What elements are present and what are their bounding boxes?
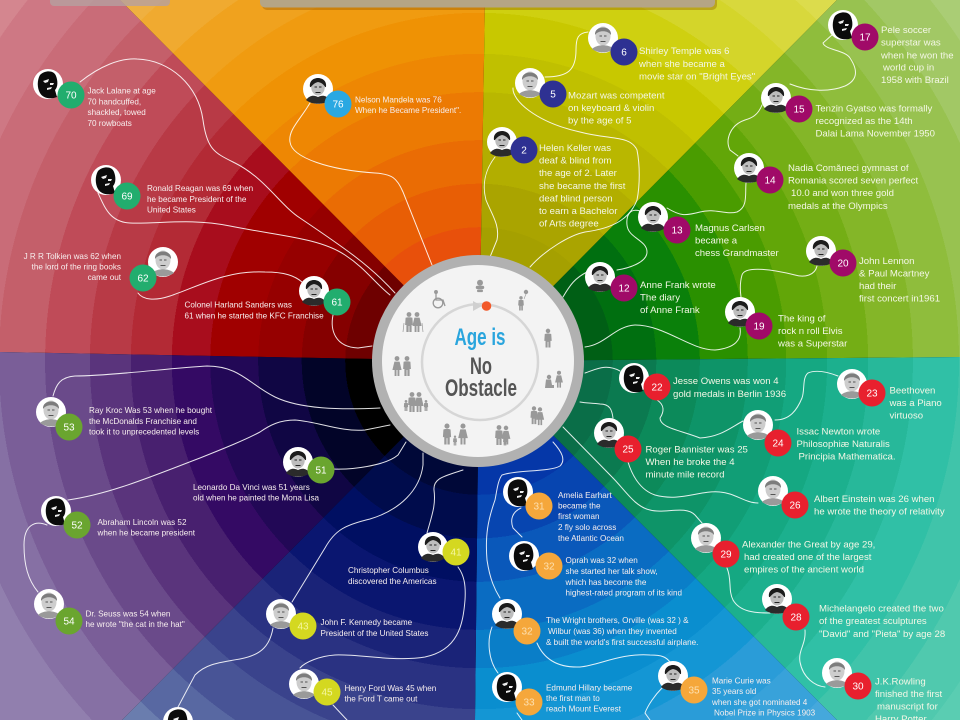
person: Henry Ford (289, 669, 436, 706)
person: Isaac Newton: Issac Newton wrote (796, 426, 880, 438)
person: Christopher Columbus: 41 (450, 548, 462, 558)
person: Anne Frank: of Anne Frank (640, 305, 700, 316)
person: Ray Kroc: 53 (63, 422, 75, 434)
person: Roger Bannister: minute mile record (646, 470, 724, 480)
person: Alexander the Great: had created one of the largest (744, 552, 872, 563)
person: John F. Kennedy (266, 599, 428, 640)
person: Amelia Earhart: 2 fly solo across (558, 523, 616, 532)
person: Marie Curie: when she got nominated 4 (711, 698, 808, 707)
person: Michelangelo: 28 (790, 612, 802, 624)
person: Pele (828, 10, 954, 86)
person: Helen Keller (487, 127, 626, 230)
person: Pele: superstar was (881, 38, 941, 48)
person: Jack Lalane (33, 69, 156, 128)
person: Ray Kroc: took it to unprecedented levels (89, 428, 199, 437)
person: Shirley Temple: movie star on "Bright Eyes" (639, 72, 755, 82)
person: Christopher Columbus (348, 532, 470, 586)
person: Nadia Comaneci: medals at the Olympics (788, 201, 888, 212)
person: Henry Ford: Henry Ford Was 45 when (344, 684, 436, 693)
person: Pele: when he won the (880, 50, 954, 61)
person: Wright brothers: The Wright brothers, Orville (was 32 ) & (546, 616, 689, 625)
person: Oprah: she started her talk show, (566, 567, 658, 576)
person: John Lennon: had their (859, 281, 897, 292)
person: J.K. Rowling (822, 658, 943, 720)
background sector: navy (122, 361, 479, 720)
person: Jesse Owens: Jesse Owens was won 4 (673, 376, 779, 387)
person: Tenzin Gyatso (761, 83, 935, 140)
background sector: green (479, 0, 960, 361)
person: Anne Frank: 12 (618, 284, 630, 294)
person: Nelson Mandela: 76 (332, 100, 344, 110)
person: John F. Kennedy: John F. Kennedy became (320, 618, 412, 627)
person: Dr. Seuss: 54 (63, 616, 75, 628)
person: Jack Lalane: 70 (65, 90, 77, 102)
person: Mozart: on keyboard & violin (568, 103, 654, 114)
background sector: purple (0, 352, 479, 720)
person: Tenzin Gyatso: recognized as the 14th (816, 116, 913, 127)
person: Oprah: Oprah was 32 when (566, 556, 638, 565)
person: Tenzin Gyatso: 15 (793, 104, 805, 116)
person: Helen Keller: Helen Keller was (539, 143, 611, 154)
person: Wright brothers: Wilbur (was 36) when they invented (548, 627, 677, 636)
person: Edmund Hillary: reach Mount Everest (546, 704, 622, 714)
person: Amelia Earhart: Amelia Earhart (558, 491, 612, 500)
icon: family of four (404, 392, 428, 412)
person: Wright brothers: & built the world's first successful airplane. (546, 638, 698, 647)
person: Alexander the Great (691, 523, 875, 576)
person: Albert Einstein: 26 (789, 500, 801, 512)
portrait: cropped bottom figure (163, 707, 193, 720)
person: Magnus Carlsen: chess Grandmaster (695, 248, 780, 259)
person: Ronald Reagan: he became President of the (147, 195, 247, 204)
person: Jesse Owens: gold medals in Berlin 1936 (673, 389, 786, 400)
person: Jack Lalane: Jack Lalane at age (88, 86, 156, 96)
person: Albert Einstein (758, 476, 945, 518)
person: Nelson Mandela: Nelson Mandela was 76 (355, 96, 442, 104)
person: Leonardo Da Vinci (193, 447, 334, 502)
person: J R R Tolkien: the lord of the ring books (32, 262, 121, 272)
hub inner disc (382, 265, 574, 457)
person: Helen Keller: deaf blind person (539, 194, 613, 204)
person: Abraham Lincoln (41, 496, 196, 538)
person: Colonel Sanders: 61 when he started the KFC Franchise (184, 312, 324, 320)
person: Abraham Lincoln: 52 (71, 520, 83, 532)
person: Dr. Seuss: he wrote "the cat in the hat" (86, 620, 185, 629)
person: Henry Ford: 45 (321, 688, 333, 698)
person: Elvis: rock n roll Elvis (778, 326, 843, 337)
background sector: blue (475, 361, 837, 720)
background sector: orange (120, 0, 485, 361)
top banner remnant centre (260, 0, 717, 10)
person: Beethoven: was a Piano (888, 398, 942, 409)
person: Jack Lalane: 70 rowboats (88, 119, 132, 128)
person: Mozart: 5 (550, 90, 556, 100)
person: Wright brothers (492, 599, 698, 647)
hub arrow (473, 301, 482, 311)
person: Nelson Mandela: When he Became President". (355, 106, 461, 115)
person: Dr. Seuss: Dr. Seuss was 54 when (86, 610, 170, 618)
person: Edmund Hillary (492, 672, 633, 716)
person: Abraham Lincoln: when he became president (96, 528, 196, 538)
person: Roger Bannister: 25 (622, 444, 634, 456)
person: Beethoven: Beethoven (890, 386, 935, 396)
hub title: Obstacle (445, 375, 517, 402)
person: John Lennon: & Paul Mcartney (859, 268, 930, 280)
person: Amelia Earhart: the Atlantic Ocean (558, 534, 624, 543)
hub title (445, 324, 517, 402)
person: Isaac Newton (743, 410, 896, 462)
person: J.K. Rowling: 30 (852, 682, 864, 692)
hub title: No (470, 353, 492, 380)
person: Pele: world cup in (882, 63, 934, 74)
person: Mozart: Mozart was competent (568, 90, 665, 102)
person: Ronald Reagan: United States (147, 206, 196, 214)
life stage icons (392, 280, 563, 446)
person: Mozart: by the age of 5 (568, 116, 631, 126)
person: Oprah: which has become the (564, 578, 647, 587)
person: Nadia Comaneci (734, 153, 918, 212)
person: J R R Tolkien: 62 (137, 274, 149, 284)
person: Nadia Comaneci: Romania scored seven perfect (788, 176, 918, 186)
person: Christopher Columbus: discovered the Americas (348, 577, 437, 586)
hub orange dot (482, 301, 491, 311)
icon: family with child (495, 425, 510, 446)
person: Beethoven: 23 (866, 388, 878, 400)
person: Elvis: The king of (778, 314, 825, 324)
person: Alexander the Great: Alexander the Great by age 29, (742, 540, 875, 550)
person: Shirley Temple: when she became a (638, 59, 726, 70)
person: Alexander the Great: empires of the ancient world (744, 564, 864, 576)
person: Shirley Temple: 6 (621, 48, 627, 58)
top banner remnant left (50, 0, 170, 6)
person: Colonel Sanders: Colonel Harland Sanders was (184, 300, 292, 310)
icon: baby (476, 280, 484, 292)
icon: adult pair (392, 356, 411, 376)
person: Henry Ford: the Ford T came out (344, 694, 418, 704)
person: Isaac Newton: Philosophiæ Naturalis (796, 439, 890, 450)
person: Jesse Owens (619, 363, 786, 400)
person: J.K. Rowling: J.K.Rowling (875, 676, 926, 688)
icon: elderly couple (403, 312, 423, 332)
person: Elvis: was a Superstar (777, 338, 848, 350)
person: Colonel Sanders (184, 276, 350, 320)
person: Marie Curie (658, 661, 816, 718)
person: Beethoven (837, 369, 942, 422)
person: Roger Bannister: When he broke the 4 (646, 457, 735, 468)
person: Helen Keller: 2 (521, 146, 527, 156)
person: Edmund Hillary: Edmund Hillary became (546, 684, 632, 692)
person: Pele: Pele soccer (881, 25, 931, 36)
person: Helen Keller: of Arts degree (539, 218, 599, 230)
icon: parents and child (443, 424, 468, 446)
person: Abraham Lincoln: Abraham Lincoln was 52 (98, 518, 186, 527)
person: Anne Frank: The diary (640, 292, 680, 304)
person: Amelia Earhart (503, 477, 624, 543)
person: Edmund Hillary: 33 (523, 698, 535, 708)
person: Marie Curie: 35 years old (712, 687, 756, 696)
person: Helen Keller: the age of 2. Later (539, 168, 618, 179)
person: Jack Lalane: shackled, towed (88, 108, 146, 117)
person: John F. Kennedy: 43 (297, 622, 309, 632)
hub outer ring (372, 255, 584, 467)
person: J.K. Rowling: finished the first (875, 689, 943, 700)
person: Michelangelo: Michelangelo created the two (819, 604, 944, 614)
person: John F. Kennedy: President of the United States (320, 629, 428, 638)
person: Shirley Temple (588, 23, 755, 82)
person: Marie Curie: 35 (688, 686, 700, 696)
person: Michelangelo: "David" and "Pieta" by age 28 (819, 629, 945, 640)
person: Magnus Carlsen: 13 (671, 226, 683, 236)
person: Nelson Mandela (303, 74, 461, 118)
person: Helen Keller: deaf & blind from (539, 156, 612, 166)
person: Ray Kroc (36, 397, 213, 440)
person: Wright brothers: 32 (521, 626, 533, 638)
person: Shirley Temple: Shirley Temple was 6 (639, 46, 729, 57)
person: Helen Keller: she became the first (539, 181, 626, 192)
person: Dr. Seuss (34, 589, 185, 634)
person: Colonel Sanders: 61 (331, 298, 343, 308)
hub progress ring (422, 304, 538, 420)
person: Alexander the Great: 29 (720, 550, 732, 560)
icon: wheelchair (433, 291, 445, 308)
person: John Lennon: 20 (837, 258, 849, 270)
person: Ronald Reagan: Ronald Reagan was 69 when (147, 184, 253, 193)
person: J R R Tolkien: came out (88, 273, 122, 282)
person: Edmund Hillary: the first man to (546, 694, 600, 703)
person: Roger Bannister (594, 418, 748, 480)
person: Tenzin Gyatso: Dalai Lama November 1950 (816, 128, 935, 140)
person: Michelangelo: of the greatest sculptures (819, 616, 927, 627)
person: Albert Einstein: he wrote the theory of relativity (814, 506, 945, 518)
background sector: yellow green (479, 0, 837, 361)
hub title: Age is (454, 324, 506, 351)
person: Oprah (509, 541, 682, 598)
background sector: teal (479, 357, 960, 720)
person: Magnus Carlsen (638, 202, 780, 259)
person: Tenzin Gyatso: Tenzin Gyatso was formally (816, 104, 932, 114)
person: Anne Frank (585, 262, 716, 316)
person: Leonardo Da Vinci: 51 (315, 466, 327, 476)
person: Nadia Comaneci: 14 (764, 176, 776, 186)
person: John Lennon (806, 236, 940, 304)
person: Ronald Reagan: 69 (121, 192, 133, 202)
icon: child with balloon (518, 290, 528, 310)
person: Isaac Newton: 24 (772, 438, 784, 450)
person: Nadia Comaneci: Nadia Comăneci gymnast of (788, 163, 909, 174)
person: Elvis: 19 (753, 322, 765, 332)
person: Beethoven: virtuoso (890, 410, 923, 422)
person: Anne Frank: Anne Frank wrote (640, 280, 716, 291)
person: Marie Curie: Nobel Prize in Physics 1903 (714, 708, 816, 718)
icon: proposal couple (545, 371, 563, 388)
person: Helen Keller: to earn a Bachelor (539, 206, 618, 217)
person: Amelia Earhart: became the (558, 502, 601, 510)
central hub (372, 255, 584, 467)
person: Elvis (725, 297, 848, 350)
person: Amelia Earhart: first woman (558, 512, 600, 521)
person: Leonardo Da Vinci: old when he painted the Mona Lisa (193, 494, 320, 502)
person: Isaac Newton: Principia Mathematica. (798, 452, 896, 462)
person: J.K. Rowling: manuscript for (877, 702, 939, 712)
person: Jesse Owens: 22 (651, 382, 663, 394)
person: John Lennon: John Lennon (859, 256, 914, 267)
icon: couple (530, 406, 544, 425)
person: Albert Einstein: Albert Einstein was 26 when (814, 494, 935, 505)
person: Ronald Reagan (91, 165, 253, 214)
person: Pele: 1958 with Brazil (881, 75, 949, 86)
person: Jack Lalane: 70 handcuffed, (88, 98, 141, 106)
person: Magnus Carlsen: Magnus Carlsen (695, 223, 765, 234)
person: Pele: 17 (859, 32, 871, 44)
person: Amelia Earhart: 31 (533, 502, 545, 512)
person: John Lennon: first concert in1961 (859, 294, 940, 304)
person: Oprah: highest-rated program of its kind (566, 588, 682, 598)
icon: teen (544, 329, 552, 348)
person: Leonardo Da Vinci: Leonardo Da Vinci was 51 years (193, 483, 310, 492)
person: J R R Tolkien: J R R Tolkien was 62 when (24, 252, 121, 261)
background sector: red (0, 0, 479, 361)
person: Christopher Columbus: Christopher Columbus (348, 566, 429, 575)
person: Ray Kroc: Ray Kroc Was 53 when he bought (89, 406, 212, 415)
person: Mozart (515, 68, 665, 126)
person: Ray Kroc: the McDonalds Franchise and (89, 417, 197, 426)
person: Roger Bannister: Roger Bannister was 25 (646, 444, 748, 456)
person: Nadia Comaneci: 10.0 and won three gold (791, 188, 894, 199)
person: Magnus Carlsen: became a (695, 236, 738, 246)
person: Michelangelo (762, 584, 945, 640)
person: Oprah: 32 (543, 562, 555, 572)
person: Marie Curie: Marie Curie was (712, 676, 771, 686)
person: J R R Tolkien (24, 247, 178, 292)
